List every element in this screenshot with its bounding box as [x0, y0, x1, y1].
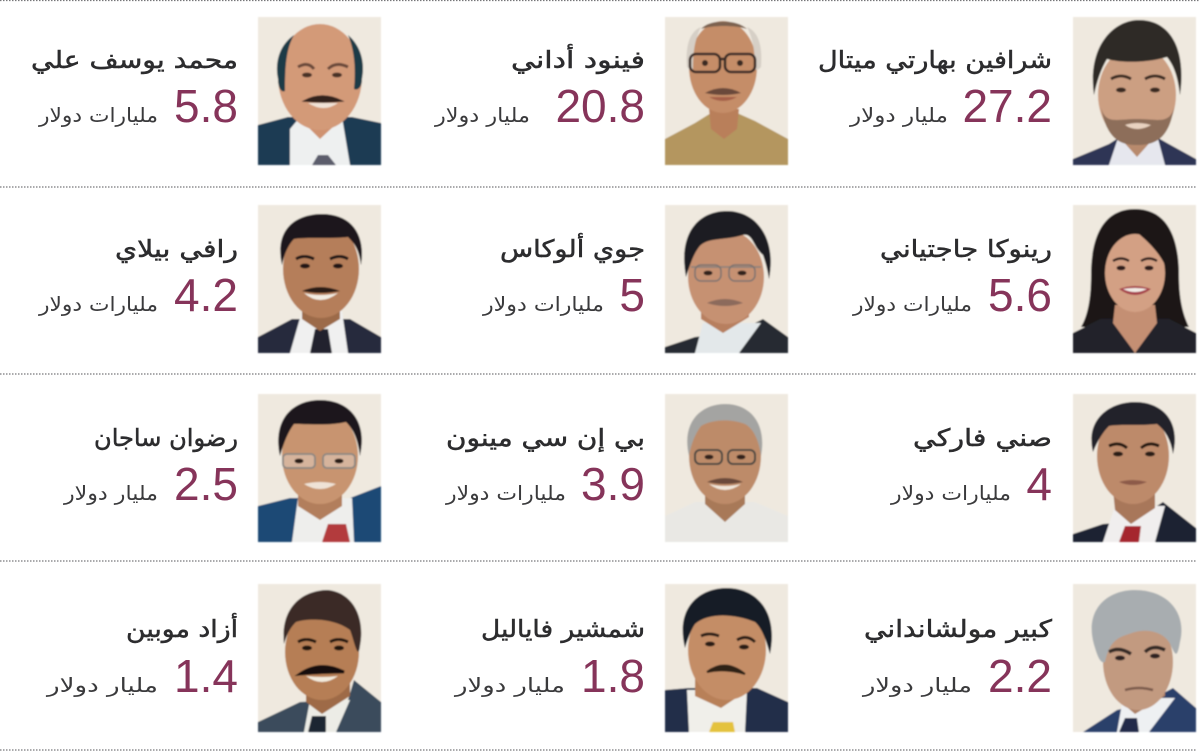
- unit: مليارات دولار: [445, 481, 566, 505]
- portrait: Yusuff Ali: [258, 17, 381, 165]
- card: PNC Menon: [445, 394, 788, 542]
- card: Shravin Bharti Mittal: [818, 17, 1196, 165]
- value: 4.2: [174, 269, 238, 321]
- value: 4: [1026, 458, 1052, 510]
- card: Renuka Jagtiani: [852, 205, 1196, 353]
- value: 2.5: [174, 458, 238, 510]
- name: شرافين بهارتي ميتال: [818, 46, 1052, 74]
- card: Yusuff Ali: [31, 17, 381, 165]
- unit: مليارات دولار: [852, 292, 972, 316]
- card: Rafi Pillai: [38, 205, 381, 353]
- portrait: Shravin Bharti Mittal: [1073, 17, 1196, 165]
- portrait: Sunny Varkey: [1073, 394, 1196, 542]
- value: 20.8: [555, 80, 645, 132]
- value: 5: [619, 269, 645, 321]
- portrait: Renuka Jagtiani: [1073, 205, 1196, 353]
- card: Vinod Adani: [434, 17, 788, 165]
- value: 1.8: [581, 650, 645, 702]
- unit: مليار دولار: [46, 673, 158, 697]
- name: شمشير فاياليل: [481, 615, 645, 643]
- value: 2.2: [988, 650, 1052, 702]
- portrait: Shamsheer Vayalil: [665, 584, 788, 732]
- unit: مليارات دولار: [38, 103, 158, 127]
- portrait: Kabir Mulchandani: [1073, 584, 1196, 732]
- unit: مليارات دولار: [482, 292, 604, 316]
- card: Kabir Mulchandani: [862, 584, 1196, 732]
- value: 5.8: [174, 80, 238, 132]
- name: فينود أداني: [511, 44, 645, 74]
- name: رينوكا جاجتياني: [880, 235, 1052, 263]
- card: Azad Moopen: [46, 584, 381, 732]
- card: Shamsheer Vayalil: [454, 584, 788, 732]
- name: صني فاركي: [913, 424, 1052, 452]
- unit: مليار دولار: [454, 673, 565, 697]
- portrait: Azad Moopen: [258, 584, 381, 732]
- name: جوي ألوكاس: [500, 233, 645, 263]
- portrait: Vinod Adani: [665, 17, 788, 165]
- name: كبير مولشانداني: [864, 615, 1053, 643]
- unit: مليار دولار: [849, 103, 948, 127]
- card: Joy Alukkas: [482, 205, 788, 353]
- unit: مليارات دولار: [38, 292, 158, 316]
- value: 3.9: [581, 458, 645, 510]
- name: أزاد موبين: [126, 613, 238, 643]
- unit: مليار دولار: [434, 103, 530, 127]
- card: Sunny Varkey: [890, 394, 1196, 542]
- name: رافي بيلاي: [115, 235, 238, 263]
- value: 1.4: [174, 650, 238, 702]
- value: 5.6: [988, 269, 1052, 321]
- value: 27.2: [962, 80, 1052, 132]
- unit: مليار دولار: [862, 673, 972, 697]
- name: محمد يوسف علي: [31, 46, 238, 74]
- portrait: Joy Alukkas: [665, 205, 788, 353]
- portrait: Rafi Pillai: [258, 205, 381, 353]
- portrait: PNC Menon: [665, 394, 788, 542]
- portrait: Rizwan Sajan: [258, 394, 381, 542]
- card: Rizwan Sajan: [63, 394, 381, 542]
- unit: مليار دولار: [63, 481, 158, 505]
- name: رضوان ساجان: [94, 424, 238, 452]
- unit: مليارات دولار: [890, 481, 1011, 505]
- name: بي إن سي مينون: [446, 424, 645, 453]
